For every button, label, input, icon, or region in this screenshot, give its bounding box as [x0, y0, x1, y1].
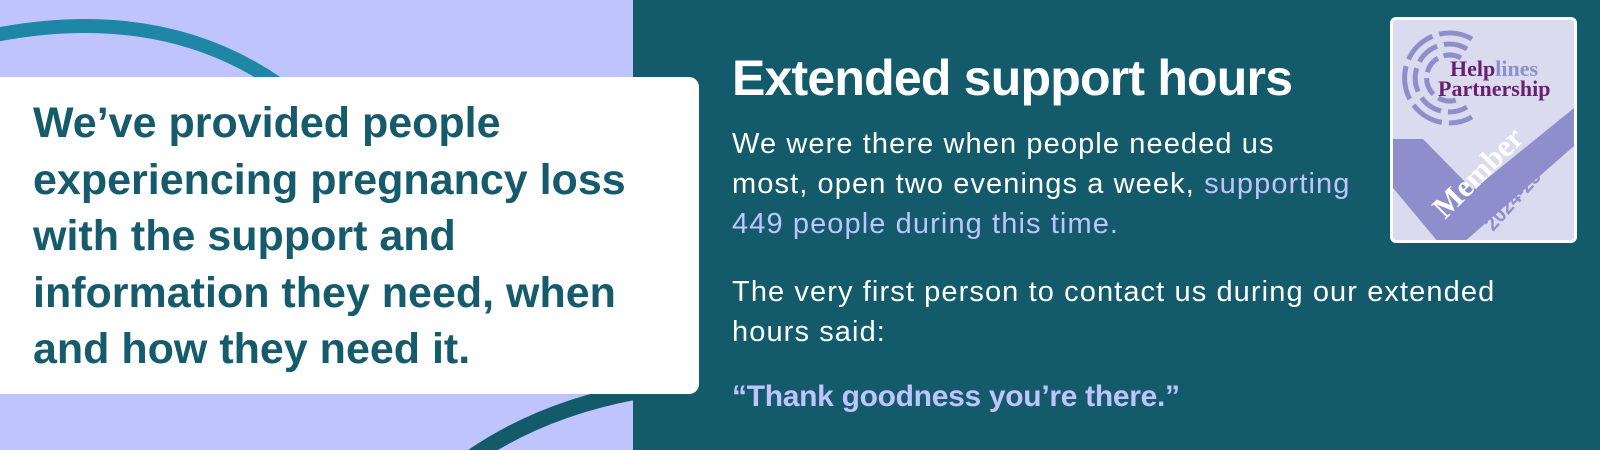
callout text: [32, 99, 626, 373]
badge: Helplines Partnership member: Helplines: [1450, 56, 1538, 81]
badge: Helplines Partnership member: Partnership: [1438, 76, 1550, 101]
callout text: with the support and: [33, 212, 456, 260]
callout text: information they need, when: [33, 268, 616, 316]
badge: Helplines Partnership member: 2024-25: [1480, 166, 1546, 235]
decorative arcs: [0, 19, 633, 450]
check ribbon: [1393, 108, 1574, 243]
body text 1: [732, 128, 1350, 240]
callout text: and how they need it.: [33, 325, 470, 373]
callout text: We’ve provided people: [33, 99, 501, 147]
quote: “Thank goodness you’re there.”: [732, 380, 1180, 413]
callout text: experiencing pregnancy loss: [33, 156, 626, 204]
badge: Helplines Partnership member: Member: [1425, 120, 1530, 225]
body text 2: [732, 276, 1495, 348]
body text 2: hours said:: [732, 316, 886, 348]
white callout box: [0, 77, 699, 394]
body text 1: 449 people during this time.: [732, 208, 1119, 240]
body text 1: most, open two evenings a week, supporting: [732, 168, 1350, 200]
body text 2: The very first person to contact us during our extended: [732, 276, 1495, 308]
left lavender panel: [0, 0, 640, 450]
badge: Helplines Partnership member: [1390, 17, 1577, 243]
title: Extended support hours: [732, 50, 1292, 106]
body text 1: We were there when people needed us: [732, 128, 1275, 160]
icon: concentric arcs: [1405, 33, 1472, 123]
right dark panel: [633, 0, 1600, 450]
